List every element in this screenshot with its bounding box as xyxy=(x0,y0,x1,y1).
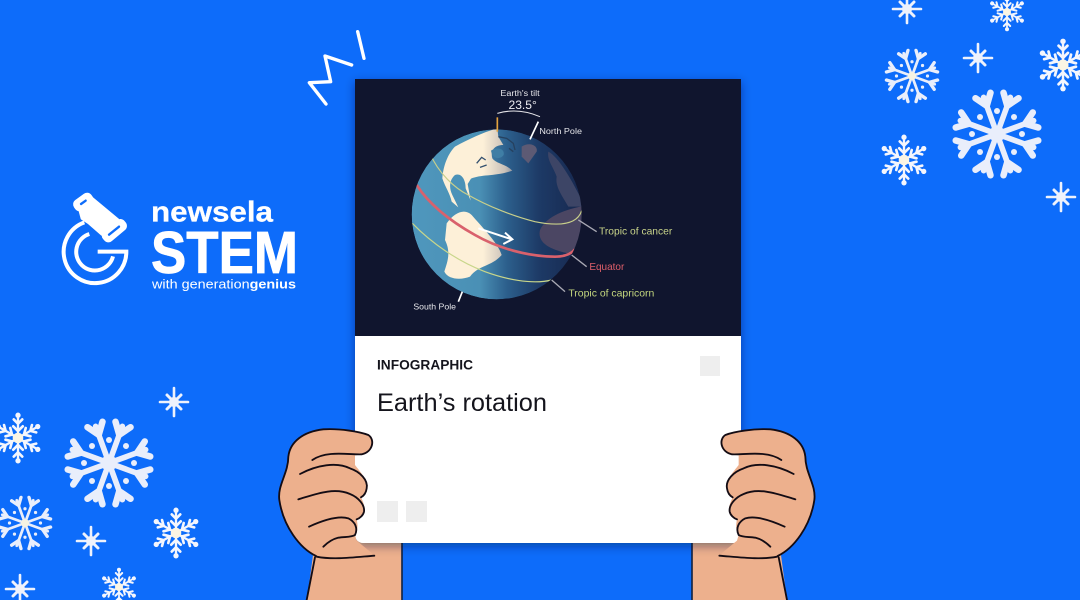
icon placeholder: top right xyxy=(700,356,720,376)
right arm xyxy=(692,540,787,600)
chart: earth diagram: North Pole xyxy=(539,126,582,136)
heading: Earth's rotation: Earth’s rotation xyxy=(377,389,547,417)
icon: microscope G mark xyxy=(64,191,129,283)
North America xyxy=(442,128,512,207)
Arctic islands xyxy=(498,137,515,152)
icon placeholder: bottom 1 xyxy=(377,501,398,522)
chart: earth diagram: Equator xyxy=(589,262,625,273)
icon placeholder: bottom 2 xyxy=(406,501,427,522)
panel: earth image xyxy=(355,79,741,336)
Tropic of cancer xyxy=(430,153,582,224)
right hand xyxy=(718,429,815,600)
globe xyxy=(412,128,585,299)
Great Lakes xyxy=(477,157,487,167)
Equator xyxy=(417,185,575,257)
logo: newsela STEM with generationgenius xyxy=(64,191,298,292)
axis xyxy=(495,117,500,132)
Hudson Bay xyxy=(491,149,504,158)
left arm xyxy=(307,540,402,600)
arm inner edges xyxy=(402,542,692,600)
tilt arc xyxy=(497,111,540,117)
Tropic of capricorn xyxy=(412,223,552,282)
snowflakes top right xyxy=(880,0,1080,211)
chart: earth diagram: Tropic of capricorn xyxy=(568,289,654,300)
rotation arrow xyxy=(478,228,512,244)
tagline: with generation genius xyxy=(151,276,296,292)
Europe xyxy=(548,152,585,207)
Africa xyxy=(540,206,582,254)
chart: earth diagram xyxy=(412,89,673,311)
pole markers xyxy=(458,122,538,302)
scribble accent lines xyxy=(309,32,364,104)
chart: earth diagram: Tropic of cancer xyxy=(599,227,673,238)
wordmark: newsela: newsela xyxy=(151,196,274,228)
snowflakes bottom left xyxy=(0,388,200,600)
panel: card xyxy=(355,79,741,543)
wordmark: STEM: STEM xyxy=(151,220,298,286)
eyebrow: INFOGRAPHIC: INFOGRAPHIC xyxy=(377,358,473,372)
left hand xyxy=(279,429,375,600)
leader lines xyxy=(552,220,597,292)
labels: Earth's tilt xyxy=(500,89,541,98)
South America xyxy=(444,212,502,279)
chart: earth diagram: South Pole xyxy=(413,301,456,311)
chart: earth diagram: 23.5° xyxy=(508,98,537,112)
